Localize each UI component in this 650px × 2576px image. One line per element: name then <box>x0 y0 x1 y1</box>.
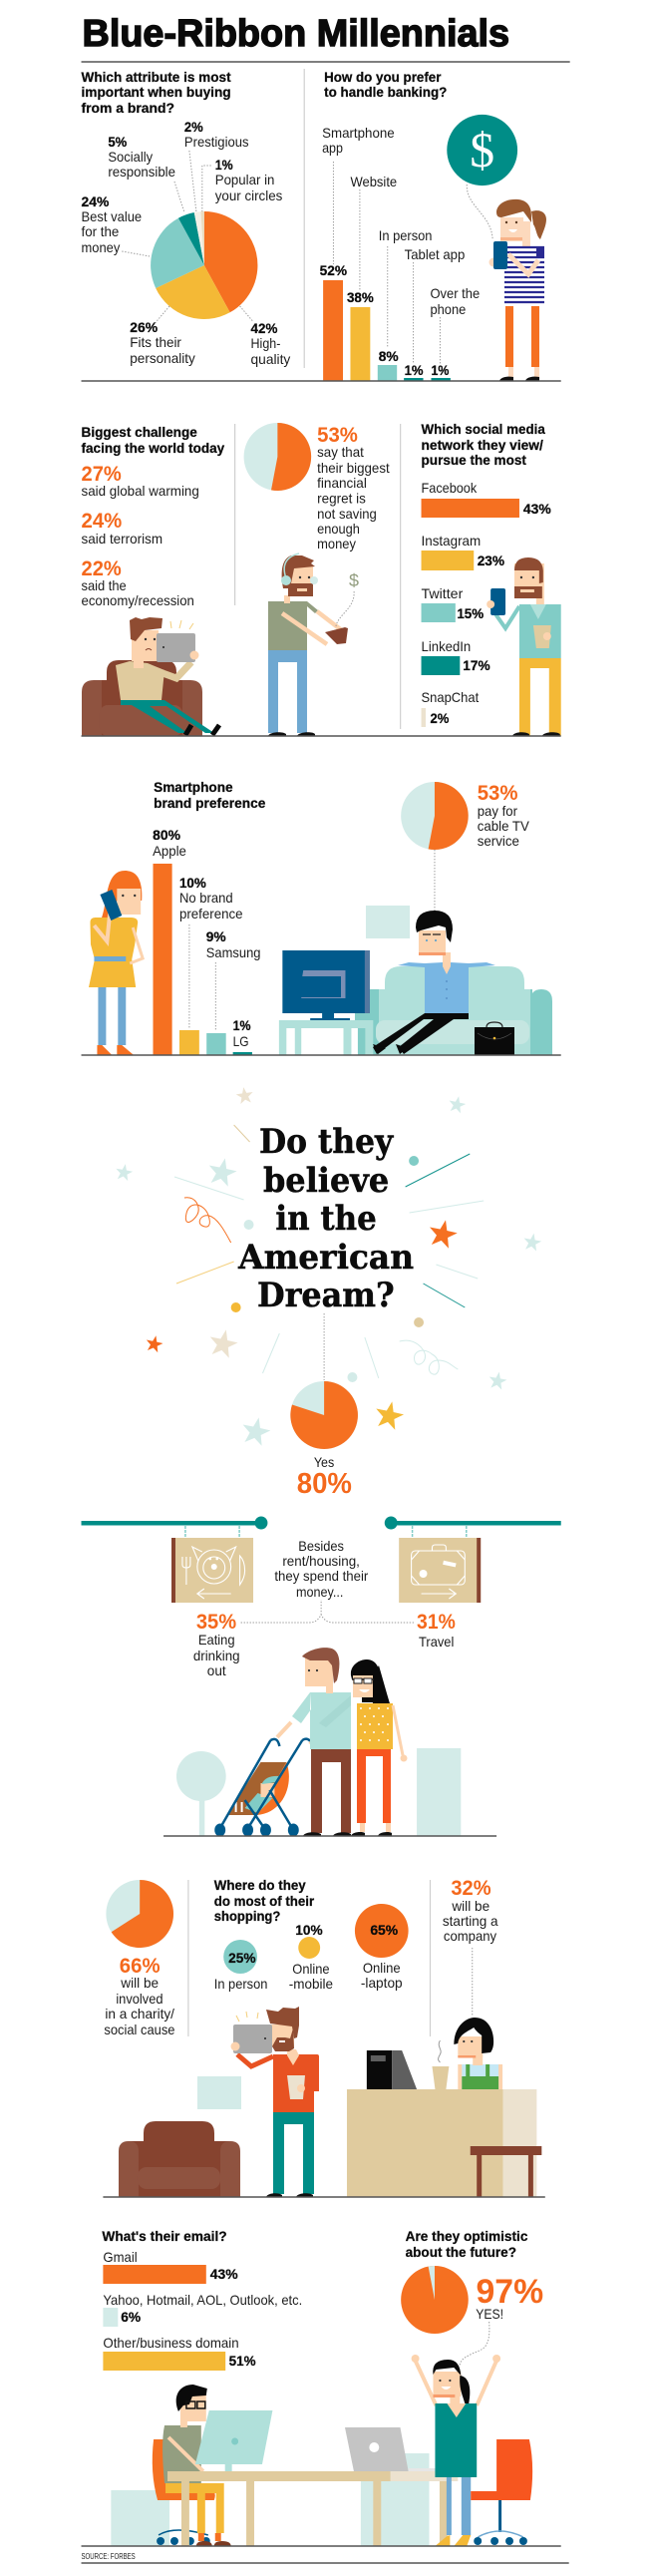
right sign: travel <box>385 1516 561 1603</box>
bar chart: smartphone brands: 9% <box>206 928 226 944</box>
pie labels: money <box>82 239 120 255</box>
bar chart: smartphone brands: preference <box>179 906 243 921</box>
pie labels: Best value <box>82 208 142 224</box>
pie labels: 26% <box>130 319 159 335</box>
pie labels: quality <box>251 351 290 367</box>
pie chart: cable TV <box>401 782 469 911</box>
text: 35% eating: drinking <box>193 1648 240 1663</box>
text: 32% company: company <box>444 1928 496 1944</box>
bar chart: banking: 1% <box>431 362 450 378</box>
heading: American Dream: in the <box>275 1198 377 1238</box>
heading: shopping <box>214 1877 315 1924</box>
pie labels: responsible <box>108 164 175 180</box>
heading: American Dream: Dream? <box>257 1275 395 1314</box>
text: challenge statistics: 24% <box>82 510 123 533</box>
bar chart: banking: Over the <box>430 285 480 301</box>
text: financial regret: financial <box>317 475 367 491</box>
bar chart: social media: Facebook <box>422 480 477 496</box>
text: financial regret: 53% <box>317 424 358 447</box>
text: besides rent: money... <box>296 1584 343 1600</box>
text: challenge statistics: 22% <box>82 557 122 580</box>
bubble chart: shopping: In person <box>214 1976 267 1992</box>
bar chart: email: 51% <box>229 2353 256 2369</box>
bar chart: social media: LinkedIn <box>422 638 471 654</box>
text: cable TV <box>478 782 530 849</box>
bar chart: smartphone brands: 1% <box>233 1017 251 1033</box>
text: cable TV: pay for <box>478 803 517 819</box>
bar chart: banking: phone <box>430 301 466 317</box>
text: besides rent <box>274 1538 369 1600</box>
text: charity: involved <box>116 1991 163 2007</box>
illustration: laptop <box>345 2427 436 2471</box>
text: financial regret: regret is <box>317 490 366 507</box>
ground line <box>82 2545 561 2547</box>
text: besides rent: Besides <box>298 1538 344 1554</box>
heading: brand attribute <box>82 69 231 116</box>
pale blocks <box>111 2453 429 2546</box>
text: 97% yes <box>460 2273 543 2367</box>
bar chart: smartphone brands: No brand <box>179 890 233 906</box>
pie labels: High- <box>251 335 281 351</box>
bubble chart: shopping: Online <box>363 1960 401 1976</box>
heading: shopping: do most of their <box>214 1893 315 1909</box>
text: cable TV: service <box>478 833 519 849</box>
bar chart: social media: Twitter <box>422 585 464 601</box>
heading: brand attribute: important when buying <box>82 84 231 100</box>
bubble chart: shopping: 65% <box>370 1922 399 1938</box>
text: 97% yes: 97% <box>477 2273 543 2311</box>
heading: banking: to handle banking? <box>324 84 447 100</box>
illustration: woman on phone <box>89 871 143 1055</box>
text: charity: will be <box>120 1975 159 1991</box>
text: cable TV: 53% <box>478 782 518 805</box>
pie chart: 80% yes <box>290 1313 358 1449</box>
bar chart: banking <box>320 125 480 381</box>
bar chart: smartphone brands: 80% <box>153 827 181 843</box>
heading: social media: pursue the most <box>422 452 526 468</box>
illustration: counter and barista <box>347 2018 541 2197</box>
spending leaders <box>241 1600 414 1623</box>
bubble chart: shopping: 25% <box>228 1950 256 1966</box>
illustration: office chair <box>471 2439 532 2545</box>
illustration: man in armchair with tablet <box>82 617 219 736</box>
bubble chart: shopping <box>214 1904 409 1992</box>
pie labels: personality <box>130 350 195 366</box>
text: 31% travel: Travel <box>419 1634 454 1650</box>
ground line <box>82 735 561 737</box>
illustration: man with tablet and cup <box>230 2007 319 2197</box>
illustration: man at computer <box>153 2385 272 2546</box>
bar chart: social media: Instagram <box>422 533 481 549</box>
text: financial regret: enough <box>317 521 360 537</box>
ground line <box>103 2196 545 2198</box>
illustration: TV and stand <box>279 950 373 1055</box>
text: charity: social cause <box>104 2022 175 2037</box>
text: 35% eating <box>193 1611 240 1678</box>
heading: email: What's their email? <box>102 2228 227 2244</box>
pie labels <box>82 119 290 367</box>
text: financial regret: not saving <box>317 506 377 522</box>
illustration: man with headphones and wallet: $ <box>349 570 359 590</box>
bar chart: smartphone brands: Apple <box>153 843 186 859</box>
illustration: stroller <box>214 1739 312 1837</box>
heading: shopping: Where do they <box>214 1877 306 1893</box>
bar chart: banking: 8% <box>379 348 399 364</box>
ground line <box>163 1835 496 1837</box>
pie leader lines <box>122 151 253 327</box>
bar chart: banking: Tablet app <box>405 246 466 262</box>
bar chart: email: 43% <box>210 2266 238 2282</box>
illustration: armchair <box>119 2076 241 2197</box>
pie labels: 2% <box>184 119 203 135</box>
text: 32% company: 32% <box>451 1877 491 1900</box>
text: financial regret: money <box>317 536 356 552</box>
bar chart: banking: app <box>322 140 343 156</box>
bar chart: social media: 15% <box>457 605 485 621</box>
illustration: desk <box>167 2471 458 2546</box>
bar chart: smartphone brands <box>153 827 260 1055</box>
text: challenge statistics: economy/recession <box>82 592 194 608</box>
text: challenge statistics: said terrorism <box>82 531 162 547</box>
pie labels: Fits their <box>130 334 181 350</box>
tree and block <box>176 1748 461 1836</box>
heading: smartphone preference: brand preference <box>154 795 266 811</box>
confetti decoration <box>115 1086 542 1447</box>
bar chart: social media: 17% <box>463 657 490 673</box>
text: challenge statistics: said the <box>82 577 127 593</box>
heading: American Dream: Do they <box>259 1121 394 1161</box>
illustration: sofa <box>355 906 552 1055</box>
text: charity <box>104 1955 175 2037</box>
text: besides rent: rent/housing, <box>282 1553 360 1569</box>
bar chart: banking: Website <box>350 174 397 189</box>
heading: banking <box>324 69 447 100</box>
bubble chart: shopping: 10% <box>295 1922 323 1938</box>
heading: social media: Which social media <box>422 421 545 437</box>
heading: optimistic: about the future? <box>406 2244 516 2260</box>
source note: SOURCE: FORBES <box>82 2552 136 2561</box>
illustration: cheering woman <box>412 2355 500 2546</box>
text: 35% eating: 35% <box>196 1611 236 1634</box>
icon: dollar balloon <box>447 115 517 239</box>
text: financial regret <box>317 424 390 552</box>
bar chart: email: Gmail <box>103 2249 138 2265</box>
pie chart: brand attributes <box>151 211 257 319</box>
icon: dollar balloon: $ <box>470 123 494 178</box>
heading: brand attribute: from a brand? <box>82 100 174 116</box>
text: yes 80%: Yes <box>314 1454 334 1470</box>
heading: social media: network they view/ <box>422 437 543 453</box>
heading: American Dream: American <box>237 1237 414 1277</box>
bar chart: email <box>103 2249 302 2371</box>
bar chart: social media: 43% <box>523 501 551 517</box>
title: Blue-Ribbon Millennials <box>83 13 509 55</box>
text: cable TV: cable TV <box>478 818 530 834</box>
text: besides rent: they spend their <box>274 1568 369 1584</box>
text: yes 80% <box>297 1454 352 1500</box>
illustration: girl with phone <box>488 199 546 381</box>
heading: optimistic <box>406 2228 528 2260</box>
heading: optimistic: Are they optimistic <box>406 2228 528 2244</box>
text: 31% travel <box>417 1611 456 1650</box>
bar chart: banking: 52% <box>320 262 348 278</box>
heading: banking: How do you prefer <box>324 69 442 85</box>
pie labels: for the <box>82 223 120 239</box>
bar chart: banking: In person <box>379 227 432 243</box>
bar chart: banking: Smartphone <box>322 125 395 141</box>
illustration: man with headphones and wallet <box>268 553 359 736</box>
text: financial regret: say that <box>317 444 364 460</box>
text: 32% company <box>443 1877 498 2016</box>
bar chart: social media: 23% <box>478 552 505 568</box>
ground line <box>82 380 561 382</box>
pie chart: financial regret <box>244 423 311 491</box>
pie labels: Prestigious <box>184 134 249 150</box>
illustration: man on sofa <box>373 911 514 1055</box>
bar chart: email: Yahoo, Hotmail, AOL, Outlook, etc. <box>103 2292 302 2308</box>
pie labels: 1% <box>215 157 233 173</box>
heading: smartphone preference: Smartphone <box>154 779 233 795</box>
text: yes 80%: 80% <box>297 1468 352 1500</box>
pie labels: 5% <box>108 134 128 150</box>
text: 35% eating: Eating <box>198 1632 235 1648</box>
bubble chart: shopping: -laptop <box>361 1975 403 1991</box>
pie labels: your circles <box>215 187 282 203</box>
text: charity: in a charity/ <box>105 2006 174 2022</box>
heading: brand attribute: Which attribute is most <box>82 69 231 85</box>
text: 32% company: will be <box>451 1898 489 1914</box>
text: 97% yes: YES! <box>476 2306 503 2322</box>
text: 31% travel: 31% <box>417 1611 456 1634</box>
bar chart: social media: 2% <box>430 710 450 726</box>
pie labels: Popular in <box>215 172 274 187</box>
pie labels: 24% <box>82 193 110 209</box>
pie chart: 97% optimistic <box>401 2266 469 2334</box>
bubble chart: shopping: Online <box>292 1961 330 1977</box>
heading: biggest challenge: facing the world today <box>82 440 224 456</box>
bar chart: social media: SnapChat <box>422 689 479 705</box>
pie labels: 42% <box>251 320 278 336</box>
heading: smartphone preference <box>154 779 266 811</box>
bar chart: email: 6% <box>121 2309 142 2325</box>
bar chart: banking: 38% <box>347 289 374 305</box>
left sign: eating <box>82 1516 267 1603</box>
bar chart: smartphone brands: LG <box>233 1033 249 1049</box>
heading: shopping: shopping? <box>214 1908 280 1924</box>
text: 32% company: starting a <box>443 1913 498 1929</box>
ground line <box>82 1054 561 1056</box>
heading: American Dream <box>237 1121 414 1314</box>
bar chart: email: Other/business domain <box>103 2335 239 2351</box>
bar chart: smartphone brands: Samsung <box>206 944 260 960</box>
pie chart: charity <box>106 1880 173 1948</box>
text: challenge statistics: said global warming <box>82 483 199 499</box>
text: challenge statistics <box>82 463 199 608</box>
heading: biggest challenge <box>82 424 224 456</box>
text: financial regret: their biggest <box>317 460 390 476</box>
heading: American Dream: believe <box>263 1160 389 1200</box>
bubble chart: shopping: -mobile <box>289 1976 333 1992</box>
bar chart: smartphone brands: 10% <box>179 875 206 891</box>
text: challenge statistics: 27% <box>82 463 122 486</box>
bar chart: social media <box>422 480 551 727</box>
heading: biggest challenge: Biggest challenge <box>82 424 197 440</box>
text: 35% eating: out <box>207 1662 226 1678</box>
heading: social media <box>422 421 545 468</box>
illustration: man with phone and cup <box>487 557 561 736</box>
pie labels: Socially <box>108 149 153 165</box>
illustration: man and woman <box>277 1648 407 1836</box>
bar chart: banking: 1% <box>405 362 424 378</box>
text: charity: 66% <box>120 1955 161 1978</box>
